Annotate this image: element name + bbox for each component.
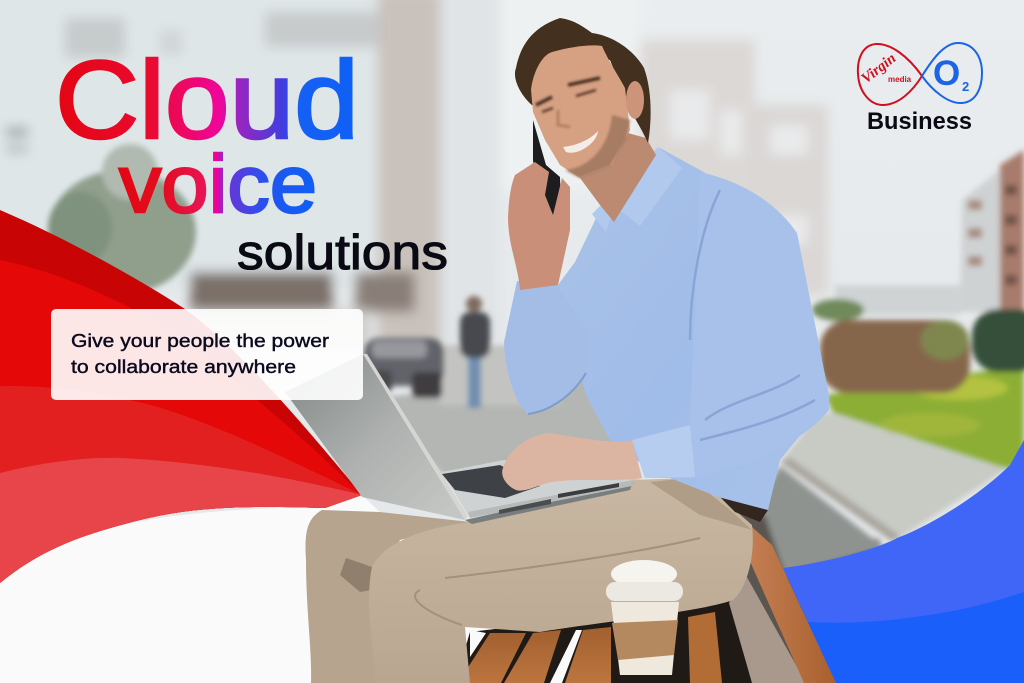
hair: [515, 18, 651, 143]
distant pedestrian: [460, 296, 490, 408]
rear leg trousers: [306, 510, 470, 683]
coffee cup: [606, 560, 683, 675]
logo Virgin script: Virgin: [859, 50, 899, 87]
logo red loop: [858, 44, 922, 105]
right red building: [835, 150, 1024, 315]
white lower-left area: [0, 495, 620, 683]
callout box: [51, 309, 363, 400]
ear: [626, 81, 644, 119]
blurred tree: [48, 144, 196, 294]
logo blue loop: [922, 43, 982, 103]
smile: [563, 131, 598, 153]
logo media word: media: [888, 75, 912, 84]
laptop: [285, 354, 633, 524]
callout text line 2: to collaborate anywhere: [71, 357, 296, 377]
blue wave shape: [783, 440, 1024, 683]
man with laptop photo illustration: [285, 18, 836, 683]
collar: [592, 147, 682, 232]
heading word: solutions: solutions: [237, 226, 448, 280]
concrete ledge: [760, 410, 1006, 575]
stubble shadow: [565, 115, 630, 178]
typing hand: [502, 433, 642, 491]
front leg trousers: [369, 478, 753, 683]
logo O: O: [933, 54, 960, 93]
torso shirt: [558, 148, 829, 510]
parked car: [364, 338, 444, 398]
eyes and brows: [536, 78, 600, 127]
left apartment building: [0, 0, 640, 350]
heading word: Cloud: Cloud: [55, 39, 359, 162]
belt: [720, 497, 768, 522]
neck: [580, 133, 656, 222]
hedges: [812, 299, 1024, 393]
lower right ground behind bench: [700, 500, 880, 683]
shirt cuff: [632, 425, 695, 478]
right sleeve: [632, 172, 829, 478]
raised left sleeve: [504, 281, 586, 414]
red wave shape: [0, 210, 362, 583]
ground and road: [362, 370, 640, 500]
logo: Virgin Media O2 Business: [858, 43, 982, 135]
callout text line 1: Give your people the power: [71, 331, 329, 351]
title: [55, 39, 448, 280]
distant pale buildings: [640, 40, 828, 310]
raised hand: [508, 162, 570, 290]
grass: [825, 365, 1024, 470]
logo subscript 2: 2: [962, 79, 969, 94]
logo Business word: Business: [867, 108, 972, 135]
phone: [533, 120, 561, 217]
face: [531, 45, 630, 178]
bench: [455, 527, 836, 683]
heading word: voice: voice: [119, 139, 317, 230]
